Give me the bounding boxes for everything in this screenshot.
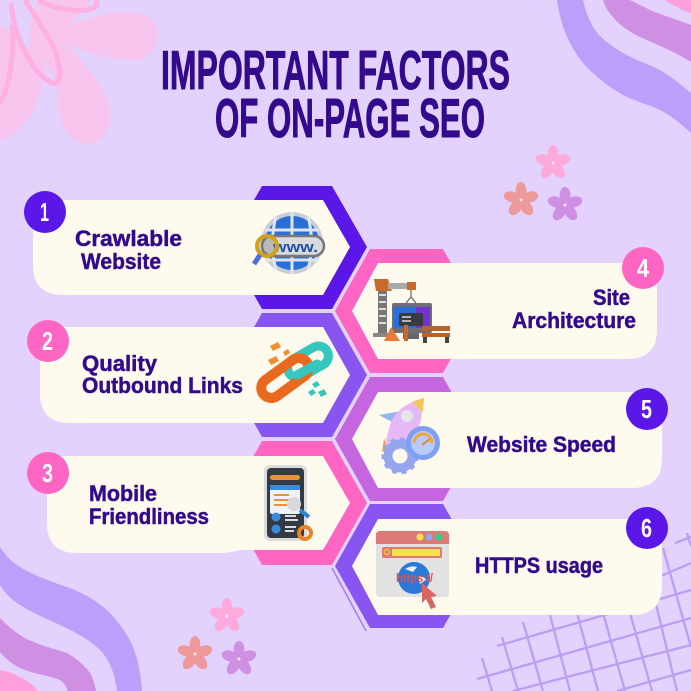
badge 1: 1: [40, 197, 49, 227]
text: mobile friendliness: Mobile: [89, 481, 157, 506]
icon: browser https: [376, 531, 449, 609]
decoration: top-right waves: [557, 0, 691, 133]
badge 3: 3: [42, 458, 53, 488]
text: quality outbound links: [82, 351, 243, 398]
icon: crane and browser: [373, 279, 450, 343]
badge 1: [24, 191, 66, 233]
icon: www globe: www.: [272, 239, 318, 256]
text: quality outbound links: Quality: [82, 351, 158, 376]
decoration: bottom-right grid: [477, 533, 691, 691]
panel: factor 3 mobile friendliness: [27, 441, 367, 565]
badge 6: 6: [641, 513, 652, 543]
decoration: bottom-left waves: [0, 547, 142, 691]
badge 4: 4: [637, 253, 649, 283]
text: crawlable website: [75, 226, 182, 274]
text: crawlable website: Crawlable: [75, 226, 182, 251]
badge 5: 5: [641, 394, 652, 424]
text: site architecture: [512, 285, 636, 333]
text: mobile friendliness: [89, 481, 209, 529]
text: quality outbound links: Outbound Links: [82, 373, 243, 398]
panel: factor 5 website speed: [335, 377, 668, 501]
badge 2: [27, 320, 69, 362]
panel: factor 2 quality outbound links: [27, 313, 367, 437]
badge 5: [626, 388, 668, 430]
badge 6: [626, 507, 668, 549]
panel: factor 1 crawlable website: [24, 186, 367, 309]
text: crawlable website: Website: [81, 249, 161, 274]
badge 3: [27, 452, 69, 494]
icon: browser https: https://: [396, 571, 434, 585]
decoration: flowers top right: [502, 145, 584, 223]
title: OF ON-PAGE SEO: [215, 87, 485, 149]
badge 4: [622, 247, 664, 289]
text: mobile friendliness: Friendliness: [89, 504, 209, 529]
icon: mobile phone: [264, 465, 311, 541]
text: https usage: HTTPS usage: [475, 553, 603, 578]
icon: rocket and gauge: [379, 398, 440, 473]
decoration: top-left flower: [0, 0, 158, 144]
icon: www globe: [254, 212, 324, 274]
icon: chain link: [257, 342, 332, 402]
text: website speed: Website Speed: [467, 432, 616, 457]
text: site architecture: Architecture: [512, 308, 636, 333]
badge 2: 2: [42, 326, 53, 356]
decoration: flowers bottom: [176, 598, 258, 677]
panel: factor 6 https usage: [332, 504, 668, 631]
title: [161, 39, 510, 149]
panel: factor 4 site architecture: [335, 247, 664, 373]
text: site architecture: Site: [593, 285, 630, 310]
